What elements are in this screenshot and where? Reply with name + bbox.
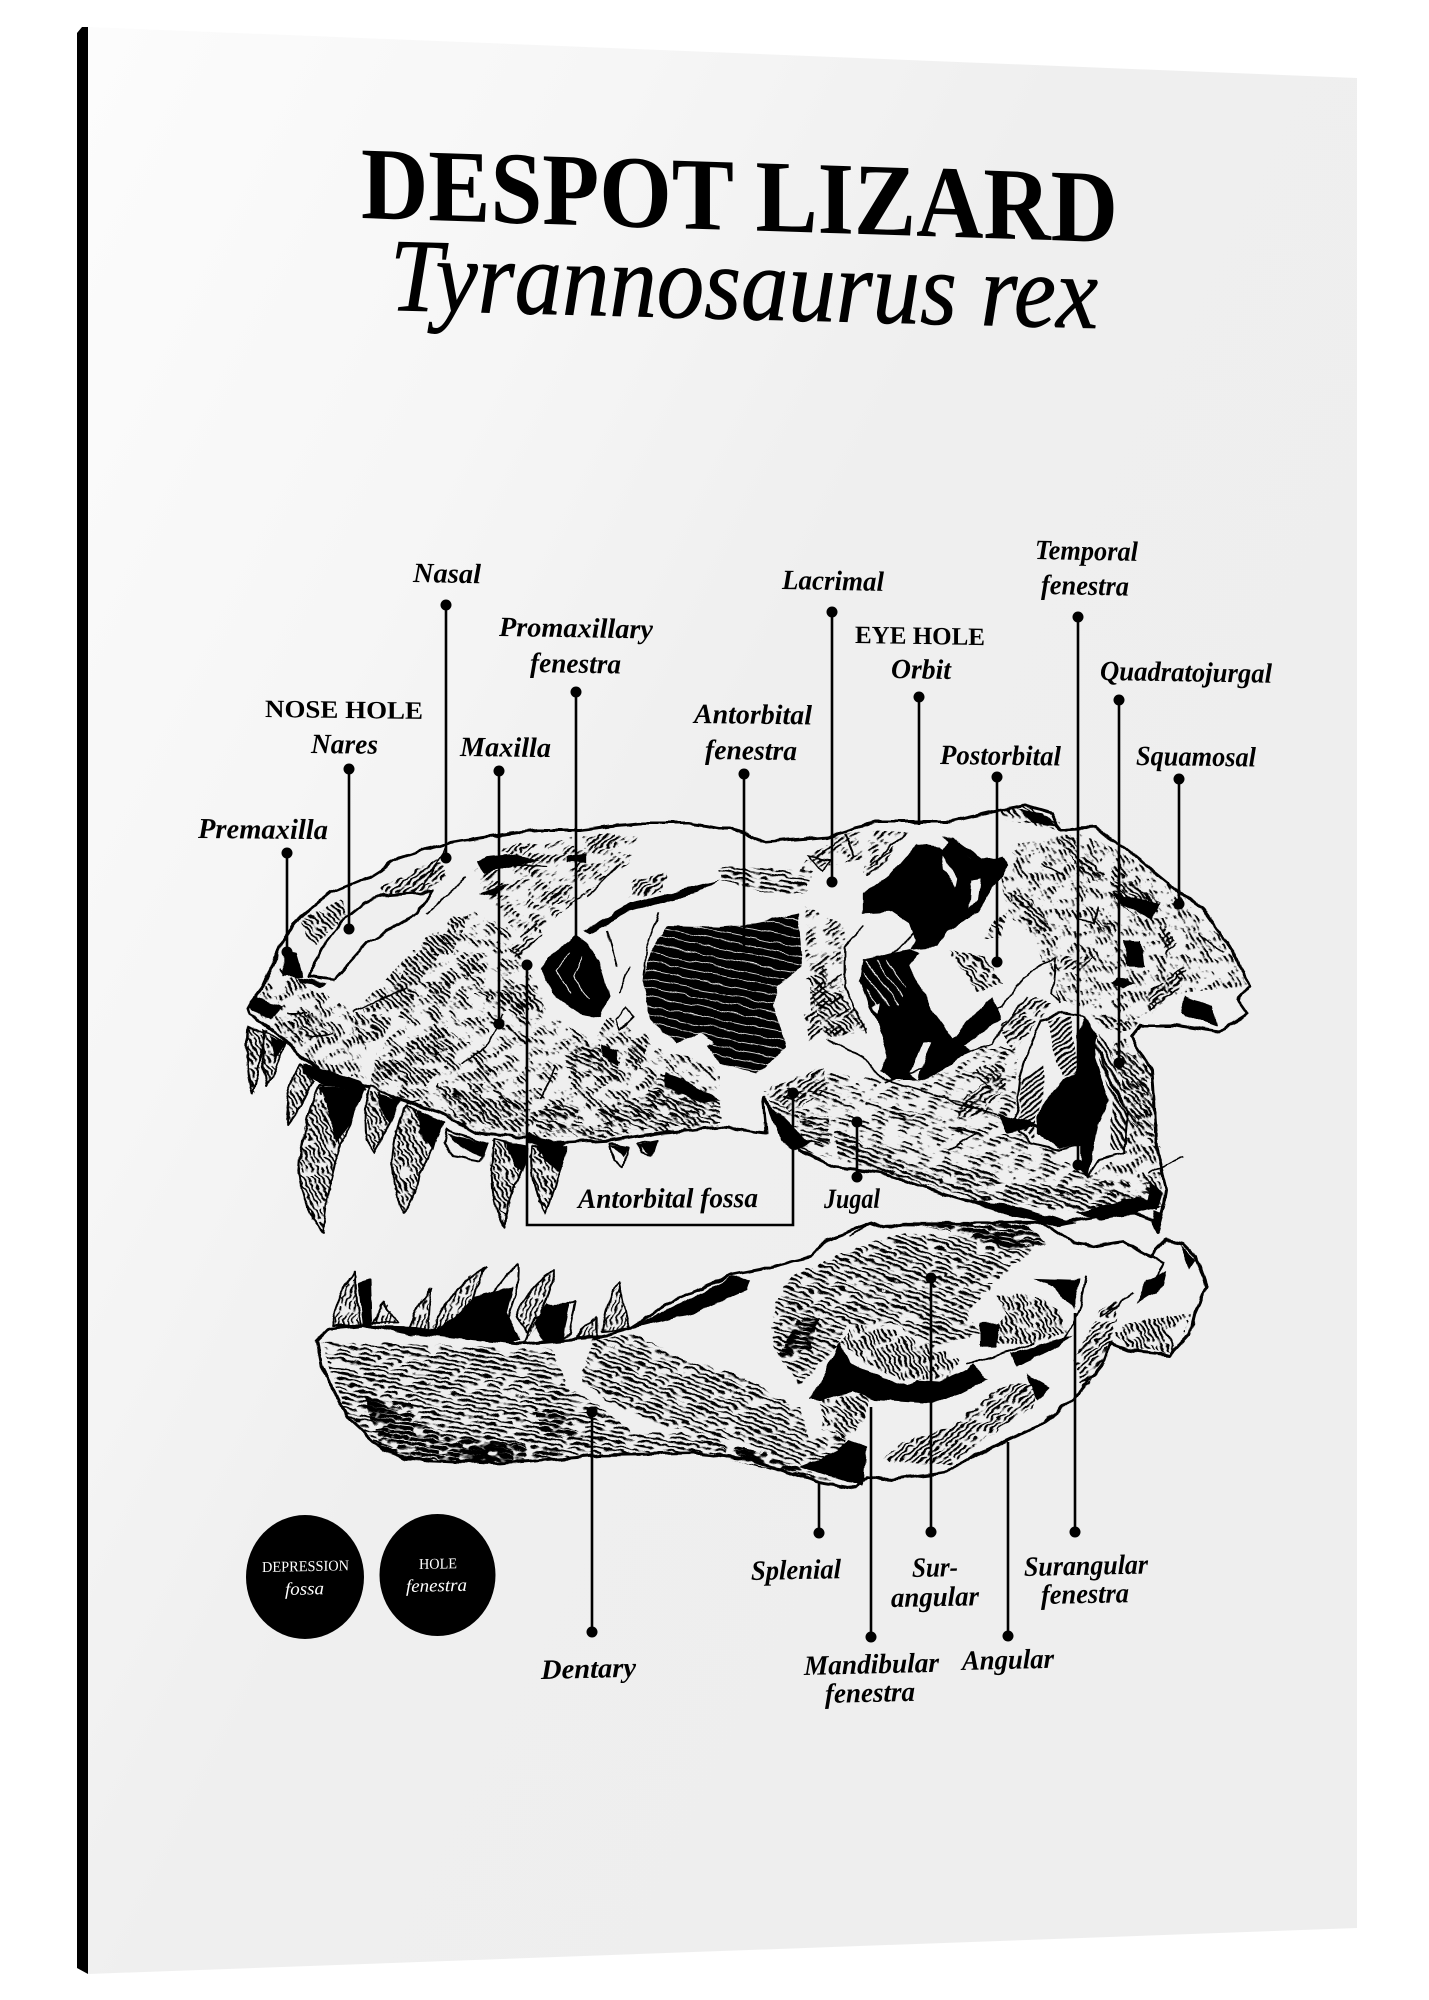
- leader: postorbital: [996, 777, 998, 962]
- legend: depression fossa: fossa: [285, 1578, 324, 1599]
- legend: depression fossa: DEPRESSION: [262, 1558, 349, 1576]
- promaxillary fenestra: [542, 937, 608, 1017]
- leader: dentary: [591, 1412, 593, 1632]
- label: NOSE HOLE Nares: Nares: [310, 729, 378, 761]
- jaw black details: [363, 1223, 1197, 1487]
- label: Jugal: Jugal: [823, 1184, 880, 1215]
- label: NOSE HOLE Nares: NOSE HOLE: [265, 696, 423, 725]
- eye hole: [863, 840, 1009, 950]
- leader: nasal: [445, 605, 447, 858]
- leader: antorbital fossa bracket: [527, 965, 793, 1225]
- label: Promaxillary fenestra: fenestra: [530, 648, 621, 680]
- poster black side edge: [77, 27, 88, 1974]
- label: Lacrimal: Lacrimal: [781, 565, 884, 598]
- label: Antorbital fenestra: [692, 699, 812, 767]
- broad scratchy texture on skull: [250, 830, 1249, 1213]
- label: Surangular fenestra: Surangular: [1024, 1550, 1149, 1583]
- leader: nares: [348, 769, 350, 929]
- label: EYE HOLE Orbit: [855, 622, 985, 686]
- light patches on jaw tip: [1080, 1267, 1187, 1347]
- label: Dentary: Dentary: [540, 1653, 637, 1686]
- leader: quadratojugal: [1118, 700, 1120, 1063]
- leader: orbit: [918, 697, 920, 825]
- label: Maxilla: Maxilla: [459, 732, 551, 764]
- crack lines on rear skull: [809, 833, 1224, 1173]
- leader dots: [282, 600, 1184, 1642]
- leader: lacrimal: [831, 612, 833, 882]
- label: Promaxillary fenestra: [498, 612, 654, 680]
- nose hole: [308, 892, 433, 980]
- title: DESPOT LIZARD: [361, 127, 1118, 265]
- leader: jugal: [856, 1122, 858, 1177]
- label: Promaxillary fenestra: Promaxillary: [498, 612, 654, 645]
- label: Postorbital: Postorbital: [939, 740, 1061, 772]
- antorbital fenestra: [643, 913, 802, 1073]
- legend: depression fossa: [246, 1515, 364, 1639]
- label: EYE HOLE Orbit: Orbit: [891, 654, 952, 686]
- label: Temporal fenestra: [1035, 535, 1138, 603]
- label: Quadratojurgal: Quadratojurgal: [1100, 656, 1272, 690]
- label: Nasal: Nasal: [412, 558, 481, 590]
- leader: promaxillary fenestra: [575, 692, 577, 940]
- leader: temporal fenestra: [1077, 617, 1079, 1165]
- legend: hole fenestra: HOLE: [419, 1556, 457, 1573]
- label: Sur-angular: angular: [891, 1581, 980, 1614]
- label: Premaxilla: Premaxilla: [197, 814, 328, 846]
- lower orbit shadow: [859, 950, 970, 1080]
- subtitle: Tyrannosaurus rex: [390, 218, 1098, 351]
- leader: premaxilla: [286, 853, 288, 952]
- label: Splenial: Splenial: [751, 1554, 841, 1587]
- temporal fenestra: [1015, 1013, 1127, 1177]
- label: Antorbital fenestra: fenestra: [705, 735, 797, 767]
- label: Antorbital fossa: Antorbital fossa: [576, 1183, 758, 1215]
- dense hatching on skull and teeth: [247, 805, 1188, 1234]
- label: Mandibular fenestra: Mandibular: [803, 1648, 940, 1682]
- leader: surangular: [930, 1278, 932, 1532]
- label: Sur-angular: Sur-: [912, 1552, 958, 1584]
- hatching: dentary and rear jaw: [322, 1223, 1193, 1487]
- label: Angular: Angular: [960, 1644, 1055, 1677]
- splenial and rear accents: [800, 1243, 1197, 1487]
- label: Temporal fenestra: fenestra: [1041, 570, 1129, 603]
- label: Surangular fenestra: [1024, 1550, 1149, 1611]
- leader: angular: [1007, 1442, 1009, 1636]
- leader lines: [287, 605, 1179, 1637]
- legend: hole fenestra: [380, 1514, 496, 1636]
- mandibular fenestra: [810, 1343, 987, 1403]
- skull outline and teeth base: [247, 805, 1250, 1234]
- label: Mandibular fenestra: fenestra: [825, 1677, 915, 1710]
- label: Temporal fenestra: Temporal: [1035, 535, 1138, 568]
- leader: splenial: [818, 1483, 820, 1533]
- label: Surangular fenestra: fenestra: [1041, 1578, 1129, 1611]
- label: Mandibular fenestra: [803, 1648, 940, 1710]
- skull illustration: lower jaw: [317, 1223, 1207, 1488]
- label: NOSE HOLE Nares: [265, 696, 423, 761]
- leader: antorbital fenestra: [743, 774, 745, 950]
- skull illustration: upper skull: [247, 805, 1250, 1234]
- crack lines on snout and maxilla: [287, 843, 660, 1110]
- leader: maxilla: [498, 771, 500, 1024]
- jaw outline and lower teeth: [317, 1223, 1207, 1488]
- label: Sur-angular: [891, 1552, 980, 1614]
- black accents on snout and maxilla: [250, 853, 720, 1173]
- label: EYE HOLE Orbit: EYE HOLE: [855, 622, 985, 651]
- label: Squamosal: Squamosal: [1136, 741, 1256, 773]
- leader: surangular fenestra: [1074, 1313, 1076, 1532]
- label: Antorbital fenestra: Antorbital: [692, 699, 812, 731]
- leader: squamosal: [1178, 779, 1180, 904]
- leader: mandibular fenestra: [870, 1407, 872, 1637]
- holes, black shadows and crack lines: [250, 810, 1224, 1233]
- legend: hole fenestra: fenestra: [406, 1575, 467, 1596]
- black accents on rear skull: [763, 810, 1216, 1233]
